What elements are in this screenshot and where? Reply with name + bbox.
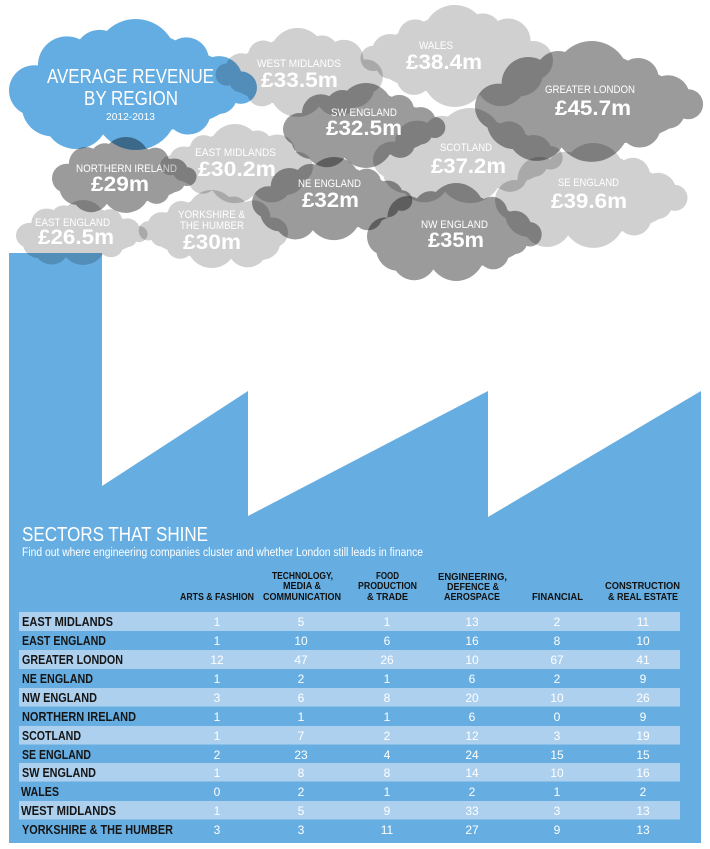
table row: East Midlands: 13 [465, 615, 479, 629]
cloud: West Midlands [216, 28, 383, 117]
section subheading: Find out where engineering companies cluster and whether London still leads in finance [22, 547, 423, 559]
cloud: Greater London: GREATER LONDON [545, 84, 635, 96]
cloud: West Midlands: WEST MIDLANDS [257, 58, 341, 70]
table row: East Midlands: 1 [384, 615, 391, 629]
table row: Greater London: 67 [550, 653, 564, 667]
table row: Greater London: 12 [210, 653, 224, 667]
table row: NW England: 8 [384, 691, 391, 705]
table row: Northern Ireland: NORTHERN IRELAND [22, 710, 136, 724]
table row: SW England: SW ENGLAND [22, 766, 96, 780]
table row: Yorkshire and the Humber: 3 [214, 823, 221, 837]
table row: West Midlands: 13 [636, 804, 650, 818]
cloud: NE England: NE ENGLAND [298, 178, 361, 190]
table row: Wales: 2 [640, 785, 647, 799]
table row: East Midlands [19, 612, 680, 631]
table row: Yorkshire and the Humber: 9 [554, 823, 561, 837]
cloud: East Midlands: EAST MIDLANDS [195, 147, 276, 159]
table row: East Midlands: 5 [298, 615, 305, 629]
cloud: NE England: £32m [302, 189, 359, 212]
table row: Scotland [19, 726, 680, 744]
table row: Wales [21, 785, 647, 799]
table row: Greater London: GREATER LONDON [22, 653, 123, 667]
table row: NW England: 3 [214, 691, 221, 705]
table row: SW England: 14 [465, 766, 479, 780]
date range: 2012-2013 [106, 111, 155, 123]
table row: Northern Ireland: 1 [214, 710, 221, 724]
table row: SE England: SE ENGLAND [22, 748, 91, 762]
table row: SW England: 10 [550, 766, 564, 780]
cloud: East Midlands: £30.2m [198, 158, 276, 181]
table row: Scotland: 2 [384, 729, 391, 743]
table row: NW England: NW ENGLAND [22, 691, 97, 705]
table row: Northern Ireland: 9 [640, 710, 647, 724]
table row: Scotland: 19 [636, 729, 650, 743]
table row: SW England [19, 763, 680, 782]
table row: East England: 6 [384, 634, 391, 648]
table row: East Midlands: 2 [554, 615, 561, 629]
table row: Yorkshire and the Humber: 27 [465, 823, 479, 837]
table row: West Midlands: 1 [214, 804, 221, 818]
cloud: Wales: £38.4m [406, 51, 482, 74]
table row: East England: 1 [214, 634, 221, 648]
table row: East England: EAST ENGLAND [22, 634, 106, 648]
table column headers: MEDIA & [283, 581, 321, 592]
table column headers: & TRADE [367, 592, 408, 603]
cloud: Yorkshire and the Humber: £30m [183, 231, 241, 254]
cloud: NW England [367, 183, 542, 281]
cloud: SE England [495, 143, 687, 248]
table row: Northern Ireland [22, 710, 647, 724]
table row: West Midlands: 5 [298, 804, 305, 818]
cloud: Northern Ireland: £29m [91, 173, 149, 196]
table row: NE England: NE ENGLAND [22, 672, 93, 686]
table column headers: ENGINEERING, [438, 572, 507, 583]
cloud: Northern Ireland: NORTHERN IRELAND [76, 163, 177, 175]
table row: SW England: 1 [214, 766, 221, 780]
table row: Greater London [19, 650, 680, 669]
table row: Scotland: 7 [298, 729, 305, 743]
table row: Yorkshire and the Humber [22, 823, 650, 837]
table column headers: CONSTRUCTION [605, 581, 680, 592]
table row: Yorkshire and the Humber: 13 [636, 823, 650, 837]
table row: NE England: 1 [214, 672, 221, 686]
table row: Wales: 2 [298, 785, 305, 799]
table row: West Midlands: 9 [384, 804, 391, 818]
table row: NE England: 1 [384, 672, 391, 686]
table row: Scotland: 3 [554, 729, 561, 743]
table row: Yorkshire and the Humber: 3 [298, 823, 305, 837]
cloud: SE England: SE ENGLAND [558, 177, 619, 189]
table row: West Midlands: 33 [465, 804, 479, 818]
table column headers: TECHNOLOGY, [272, 571, 333, 582]
table row: Scotland: 12 [465, 729, 479, 743]
table row: Northern Ireland: 1 [384, 710, 391, 724]
table row: West Midlands: 3 [554, 804, 561, 818]
table row: Greater London: 41 [636, 653, 650, 667]
factory silhouette [9, 253, 701, 843]
table row: Wales: 0 [214, 785, 221, 799]
table row: NW England [19, 688, 680, 706]
cloud: Scotland: SCOTLAND [440, 142, 492, 154]
table row: NE England: 6 [469, 672, 476, 686]
table row: Wales: 2 [469, 785, 476, 799]
table row: SE England [22, 748, 650, 762]
cloud: NW England: £35m [428, 229, 484, 252]
table row: SE England: 23 [294, 748, 308, 762]
table row: Greater London: 26 [380, 653, 394, 667]
cloud: West Midlands: £33.5m [261, 69, 338, 92]
cloud: Greater London [475, 41, 703, 162]
table row: Yorkshire and the Humber: 11 [381, 823, 394, 837]
table column headers: COMMUNICATION [263, 592, 341, 603]
cloud: East England: £26.5m [38, 226, 114, 249]
table row: SW England: 8 [298, 766, 305, 780]
table row: East Midlands: EAST MIDLANDS [22, 615, 113, 629]
cloud: Wales: WALES [419, 40, 453, 52]
cloud: Yorkshire and the Humber: THE HUMBER [180, 220, 244, 232]
table row: NE England [22, 672, 647, 686]
table row: East England: 10 [294, 634, 308, 648]
table row: Greater London: 47 [294, 653, 308, 667]
table row: Yorkshire and the Humber: YORKSHIRE & THE HUMBER [22, 823, 173, 837]
table row: NW England: 6 [298, 691, 305, 705]
table row: SE England: 2 [214, 748, 221, 762]
cloud: SW England: SW ENGLAND [331, 107, 397, 119]
table row: NE England: 2 [554, 672, 561, 686]
table row: Northern Ireland: 1 [298, 710, 305, 724]
table column headers: DEFENCE & [447, 582, 499, 593]
table row: SE England: 4 [384, 748, 391, 762]
table row: SE England: 15 [550, 748, 564, 762]
table row: Northern Ireland: 6 [469, 710, 476, 724]
table row: Greater London: 10 [465, 653, 479, 667]
cloud: East Midlands [160, 124, 313, 203]
table row: East England: 10 [636, 634, 650, 648]
table row: NW England: 26 [636, 691, 650, 705]
cloud: NW England: NW ENGLAND [421, 219, 488, 231]
table row: Scotland: SCOTLAND [22, 729, 81, 743]
table row: NE England: 9 [640, 672, 647, 686]
table column headers: AEROSPACE [444, 592, 500, 603]
cloud: SW England [283, 83, 445, 168]
table row: East Midlands: 1 [214, 615, 221, 629]
table row: East England [22, 634, 650, 648]
table column headers: FOOD [376, 571, 399, 582]
table row: NW England: 10 [550, 691, 564, 705]
table row: SE England: 24 [465, 748, 479, 762]
table column headers: PRODUCTION [358, 581, 417, 592]
table row: Wales: 1 [554, 785, 561, 799]
table row: SW England: 8 [384, 766, 391, 780]
cloud: Scotland: £37.2m [431, 155, 506, 178]
table row: SW England: 16 [636, 766, 650, 780]
table column headers: ARTS & FASHION [180, 592, 254, 603]
table row: Wales: 1 [384, 785, 391, 799]
table row: SE England: 15 [636, 748, 650, 762]
cloud: Yorkshire and the Humber [139, 190, 288, 268]
table column headers [180, 571, 680, 603]
cloud: Yorkshire and the Humber: YORKSHIRE & [178, 209, 246, 221]
table row: East Midlands: 11 [637, 615, 650, 629]
table row: West Midlands: WEST MIDLANDS [21, 804, 116, 818]
table column headers: FINANCIAL [532, 592, 583, 603]
table row: NW England: 20 [465, 691, 479, 705]
cloud: East England: EAST ENGLAND [35, 217, 110, 229]
table row: East England: 8 [554, 634, 561, 648]
cloud: Scotland [373, 108, 563, 203]
table row: East England: 16 [465, 634, 479, 648]
title line 2: BY REGION [84, 88, 178, 110]
cloud: SW England: £32.5m [326, 117, 402, 140]
table row: Wales: WALES [21, 785, 59, 799]
cloud: Northern Ireland [52, 137, 197, 213]
table row: West Midlands [19, 801, 680, 820]
title: AVERAGE REVENUE [47, 66, 214, 88]
cloud: East England [16, 200, 148, 265]
cloud: Greater London: £45.7m [555, 97, 631, 120]
cloud: SE England: £39.6m [551, 190, 627, 213]
cloud: NE England [252, 157, 412, 240]
section heading: SECTORS THAT SHINE [22, 524, 208, 546]
table column headers: & REAL ESTATE [608, 592, 678, 603]
table row: Scotland: 1 [214, 729, 221, 743]
cloud: Wales [361, 5, 553, 107]
table row: NE England: 2 [298, 672, 305, 686]
table row: Northern Ireland: 0 [554, 710, 561, 724]
cloud: average revenue by region title [9, 19, 257, 150]
